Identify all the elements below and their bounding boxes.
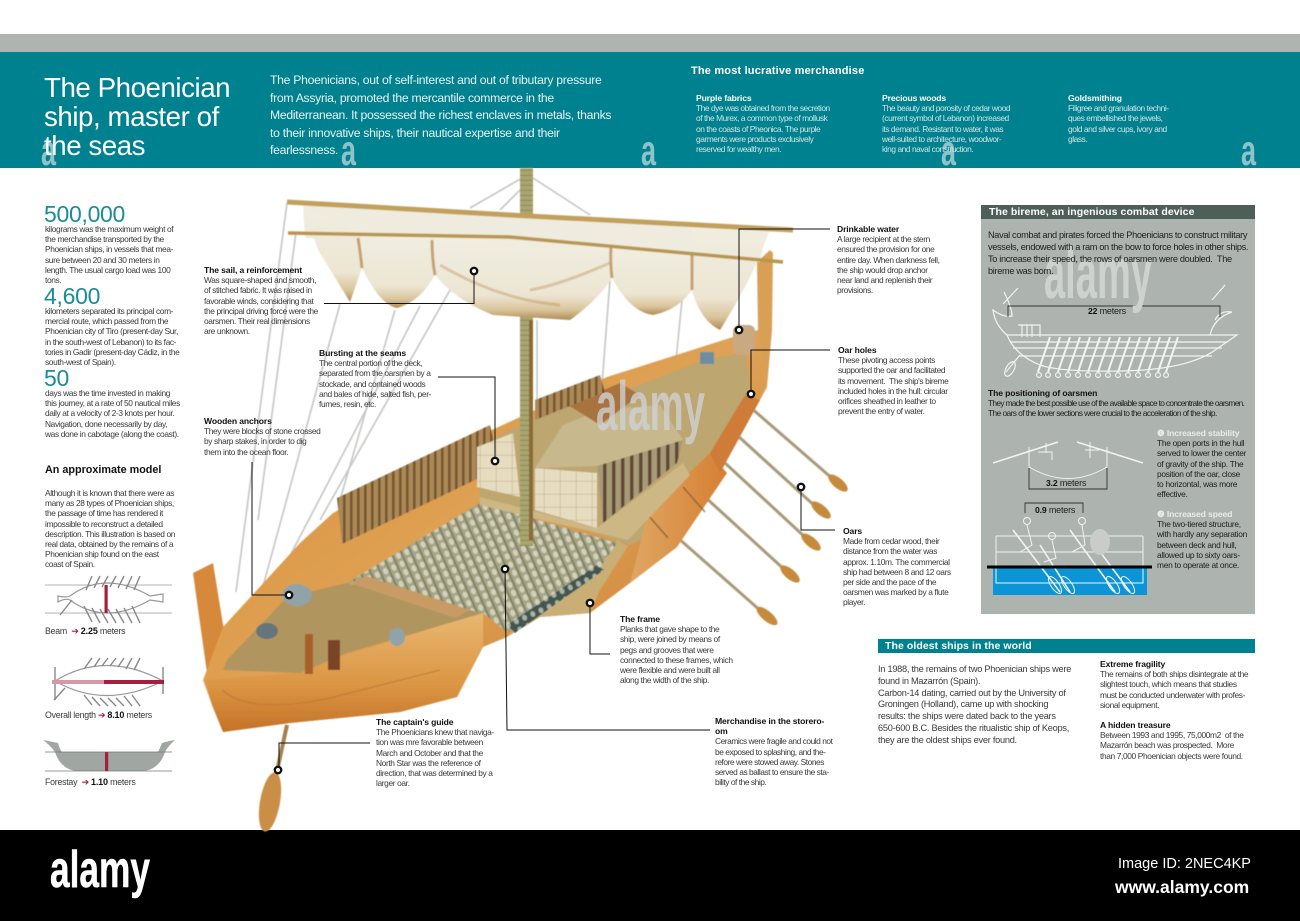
callout: bursting at the seams [319,348,432,409]
callout: drinkable water: provisions. [837,285,873,295]
callout: drinkable water: entire day. When darkness fell, [837,255,940,265]
teal header panel [0,52,1300,168]
callout: merchandise in the storeroom: Ceramics were fragile and could not [715,736,832,746]
callout: drinkable water: near land and replenish their [837,275,932,285]
watermark over bireme panel: alamy [1044,234,1152,314]
stat text: 500,000: length. The usual cargo load was 100 [45,265,170,275]
text: increased stability: The open ports in the hull [1157,438,1244,448]
text: approximate model: the passage of time has rendered it [45,508,163,518]
bireme heading: The bireme, an ingenious combat device [989,206,1195,218]
cargo base deck [477,352,752,545]
stat text: 500,000: tons. [45,275,61,285]
sail top band [303,205,767,262]
merchandise: purple fabrics: reserved for wealthy men. [696,144,781,154]
stat text: 4,600: south-west of Spain). [45,357,116,367]
callout: sail [204,265,318,336]
callout: sail: are unknown. [204,326,250,336]
callout: sail: The sail, a reinforcement [204,265,302,275]
merchandise: precious woods: king and naval construction. [882,144,973,154]
footer logo: alamy [50,841,150,899]
merchandise: goldsmithing: gold and silver cups, ivory and [1068,124,1167,134]
merchandise: goldsmithing [1068,93,1169,144]
stockade fence [337,425,500,544]
upper yard [287,202,793,230]
merchandise: goldsmithing: glass. [1068,134,1087,144]
stat text: 4,600 [45,306,180,367]
stern deck [223,583,483,673]
callout: wooden anchors: They were blocks of stone crossed [204,426,320,436]
callout: bursting at the seams: Bursting at the seams [319,348,406,358]
callout: the frame: pegs and grooves that were [620,645,713,655]
callout: wooden anchors [204,416,320,457]
callout line: water [739,229,830,330]
diagram: overall length [52,658,164,706]
merchandise: precious woods: The beauty and porosity of cedar wood [882,103,1010,113]
title: ship, master of [44,101,219,132]
watermark over ship: alamy [596,367,705,445]
sail folds [358,238,692,305]
intro text: to their innovative ships, their nautical expertise and their [270,126,560,140]
title: the seas [44,130,145,161]
text: hidden treasure [1100,720,1244,761]
callout: captain's guide: larger oar. [376,778,410,788]
text: hidden treasure: A hidden treasure [1100,720,1171,730]
merchandise: goldsmithing: Filigree and granulation techni- [1068,103,1169,113]
callout: merchandise in the storeroom: be exposed to splashing, and the- [715,747,826,757]
stem post [755,250,773,402]
callout: merchandise in the storeroom: bility of the ship. [715,777,766,787]
callout: drinkable water: A large recipient at the stern [837,234,930,244]
bireme header bar [981,205,1255,219]
oldest ships text [878,664,1071,745]
text: extreme fragility: The remains of both ships disintegrate at the [1100,669,1248,679]
callout: oar holes: supported the oar and facilitated [838,365,945,375]
top grey band [0,34,1300,52]
intro text: from Assyria, promoted the mercantile commerce in the [270,91,554,105]
footer image id: Image ID: 2NEC4KP [1118,856,1251,872]
oarsmen well [347,503,617,632]
text: increased speed [1157,509,1247,570]
callout: oar holes: These pivoting access points [838,355,935,365]
merchandise: goldsmithing: ques embellished the jewels, [1068,113,1162,123]
title: The Phoenician [44,72,230,103]
callout: oars: approx. 1.10m. The commercial [843,557,950,567]
watermark letters in header: a [41,127,57,175]
water barrel [733,325,755,355]
callout: drinkable water: the ship would drop anchor [837,265,928,275]
callout: oar holes: prevent the entry of water. [838,406,925,416]
leader lines and markers [252,229,835,773]
stat text: 4,600: Phoenician city of Tiro (present-day Sur, [45,326,178,336]
oldest ships text: Carbon-14 dating, carried out by the University of [878,688,1066,698]
bow outer planks [630,453,727,583]
callout: bursting at the seams: and bales of hide, salted fish, per- [319,389,431,399]
markers [275,268,804,773]
text: extreme fragility: must be conducted underwater with profes- [1100,690,1245,700]
callout: the frame: Planks that gave shape to the [620,624,719,634]
callout: oar holes: Oar holes [838,345,876,355]
merchandise: precious woods: (current symbol of Lebanon) increased [882,113,1009,123]
panel: bireme grey background [981,205,1255,614]
merchandise: purple fabrics: The dye was obtained from the secretion [696,103,830,113]
callout: the frame: ship, were joined by means of [620,634,720,644]
callout line: sail [324,271,474,304]
watermark letters in header: a [641,127,657,175]
stat text: 4,600: in the south-west of Lebanon) to its fac- [45,337,176,347]
stat text: 500,000: the merchandise transported by the [45,234,164,244]
callout: merchandise in the storeroom [715,716,833,787]
stat: 4,600: 4,600 [44,283,100,309]
callout: the frame: were flexible and were built all [620,665,720,675]
stat text: 50 [45,388,180,439]
text: hidden treasure: Between 1993 and 1995, 75,000m2 of the [1100,730,1244,740]
callout: merchandise in the storeroom: refore were stowed away. Stones [715,757,824,767]
callout line: merchandise [505,569,710,730]
text: increased speed: men to operate at once. [1157,560,1239,570]
callout: oars: per side and the pace of the [843,577,936,587]
walkway plank beside well [350,576,470,618]
oarsmen lower dark row [507,565,604,633]
callout: sail: of stitched fabric. It was raised in [204,285,312,295]
callout line: frame [590,603,610,654]
callout: sail: the principal driving force were the [204,306,318,316]
text: approximate model: real data, obtained by the remains of a [45,539,173,549]
merchandise: purple fabrics: on the coasts of Pheonica. The purple [696,124,820,134]
callout: sail: Was square-shaped and smooth, [204,275,316,285]
anchors [256,352,714,646]
callout: bursting at the seams: The central portion of the deck, [319,358,422,368]
text: increased stability: position of the oar, close [1157,469,1240,479]
cargo left stack [477,433,520,497]
oldest ships text: Groningen (Holland), came up with shocking [878,699,1048,709]
watermark letters in header: a [341,127,357,175]
bow plank seams [648,487,705,538]
callout: oar holes [838,345,948,416]
diagram: forestay [43,740,175,771]
callout: oars: distance from the water was [843,546,937,556]
callout line: oars [801,487,835,530]
bireme intro: Naval combat and pirates forced the Phoenicians to construct military [988,230,1247,240]
callout: bursting at the seams: stockade, and contained woods [319,379,425,389]
dimension bracket: 0.9 meters [1025,503,1083,513]
merchandise: purple fabrics: of the Murex, a common type of mollusk [696,113,827,123]
stat text: 4,600: kilometers separated its principal com- [45,306,173,316]
cargo cage [597,440,683,523]
bow lower tan strip [507,540,628,637]
cargo ledge [480,463,690,540]
text: positioning of oarsmen: The positioning of oarsmen [988,388,1097,398]
text: hidden treasure: Mazarrón beach was prospected. More [1100,740,1234,750]
callout: drinkable water [837,224,940,295]
label: overall length: Overall length ➔ 8.10 meters [45,710,152,720]
callout: oar holes: orifices sheathed in leather to [838,396,936,406]
bireme intro [988,230,1248,276]
merchandise: purple fabrics [696,93,830,154]
intro text [270,73,612,157]
forward fence top [535,375,605,420]
callout: the frame: connected to these frames, which [620,655,733,665]
merchandise: precious woods: Precious woods [882,93,946,103]
forward dark cargo [568,383,640,425]
callout: sail: favorable winds, considering that [204,296,313,306]
callout: merchandise in the storeroom: om [715,726,728,736]
stat text: 50: Navigation, done necessarily by day, [45,419,167,429]
text: increased stability: to horizontal, was more [1157,479,1237,489]
callout: captain's guide: March and October and that the [376,748,483,758]
text: extreme fragility: sional equipment. [1100,700,1159,710]
text: increased stability: of gravity of the ship. The [1157,459,1243,469]
text: increased stability: effective. [1157,489,1188,499]
intro text: The Phoenicians, out of self-interest and out of tributary pressure [270,73,601,87]
oldest ships text: found in Mazarrón (Spain). [878,676,980,686]
callout: captain's guide: North Star was the reference of [376,758,481,768]
text: positioning of oarsmen [988,388,1244,418]
stat text: 500,000: kilograms was the maximum weight of [45,224,173,234]
callout: oars: ship had between 8 and 12 oars [843,567,951,577]
text: extreme fragility: slightest touch, which means that studies [1100,679,1237,689]
hull silhouette [203,330,767,732]
diagram: rowers [987,518,1152,595]
stat text: 50: days was the time invested in making [45,388,170,398]
callout: drinkable water: ensured the provision for one [837,244,934,254]
watermark letters in header [41,127,1257,175]
callout: oars [843,526,951,607]
text: approximate model: many as 28 types of Phoenician ships, [45,498,174,508]
oldest ships text: results: the ships were dated back to the years [878,711,1056,721]
merchandise: goldsmithing: Goldsmithing [1068,93,1122,103]
callout: captain's guide: The Phoenicians knew that naviga- [376,727,494,737]
text: approximate model: impossible to reconstruct a detailed [45,519,163,529]
text: increased speed: ❷ Increased speed [1157,509,1232,519]
callout: wooden anchors: by sharp stakes, in order to dig [204,436,306,446]
stat text: 50: daily at a velocity of 2-3 knots per hour. [45,408,174,418]
text: extreme fragility: Extreme fragility [1100,659,1165,669]
text: increased stability: ❶ Increased stability [1157,428,1239,438]
cargo top bales [535,405,683,468]
text: positioning of oarsmen: The oars of the lower sections were crucial to the acceleration of the ship. [988,408,1217,418]
dimension bracket: 3.2 meters [1029,468,1107,489]
lower yard [288,233,783,262]
callout: bursting at the seams: separated from the oarsmen by a [319,368,431,378]
callout: captain's guide: tion was mre favorable between [376,737,483,747]
label: 3.2 meters: 3.2 meters [1046,478,1086,488]
stat text: 4,600: mercial route, which passed from the [45,316,168,326]
bireme intro: bireme was born. [988,266,1053,276]
illustration: Phoenician ship [193,168,850,833]
callout: oar holes: its movement. The ship's bireme [838,376,948,386]
callout: wooden anchors: Wooden anchors [204,416,272,426]
steering oar [255,725,287,833]
text: approximate model: coast of Spain. [45,559,95,569]
mast [520,168,533,546]
merchandise heading: The most lucrative merchandise [691,65,865,77]
oldest ships text: 650-600 B.C. Besides the ritualistic ship of Keops, [878,723,1069,733]
callout: captain's guide: The captain's guide [376,717,453,727]
diagram: bireme ship side view [993,285,1237,378]
bireme intro: To increase their speed, the rows of oarsmen were doubled. The [988,254,1232,264]
stat text: 500,000: Phoenician ships, in vessels that mea- [45,244,173,254]
watermark letters in header: a [1241,127,1257,175]
stern lower hull side [205,612,483,732]
text: increased speed: with hardly any separation [1157,529,1247,539]
callout line: anchors [252,462,289,595]
merchandise: precious woods [882,93,1010,154]
text: increased speed: The two-tiered structure, [1157,519,1241,529]
callout: sail: oarsmen. Their real dimensions [204,316,310,326]
callout: captain's guide [376,717,494,788]
callout: the frame [620,614,733,685]
stat: 50: 50 [44,365,69,391]
text: approximate model [45,488,175,569]
bow rim [710,395,760,473]
watermark letters in header: a [941,127,957,175]
label: beam: Beam ➔ 2.25 meters [45,626,125,636]
footer url: www.alamy.com [1115,877,1249,897]
stat text: 4,600: tories in Gadir (present-day Cádiz, in the [45,347,179,357]
text: approximate model: description. This illustration is based on [45,529,175,539]
merchandise: precious woods: its demand. Resistant to water, it was [882,124,1003,134]
text: increased speed: between deck and hull, [1157,540,1237,550]
cargo bales front [535,468,597,528]
stern hull plank seam [222,670,440,705]
text: approximate model: Phoenician ship found on the east [45,549,159,559]
diagram: hull section [993,442,1143,478]
callout: the frame: along the width of the ship. [620,675,709,685]
steering post [305,634,340,674]
text: increased stability [1157,428,1246,499]
dimension bracket: 22 meters [1008,306,1220,317]
callout: oars: Made from cedar wood, their [843,536,939,546]
label: 22 meters: 22 meters [1088,306,1126,316]
callout: oars: oarsmen was marked by a flute [843,587,948,597]
text: approximate model: Although it is known that there were as [45,488,174,498]
oars on starboard side [678,407,850,628]
bireme intro: vessels, endowed with a ram on the bow to force holes in other ships. [988,242,1248,252]
callout: oar holes: included holes in the hull: circular [838,386,948,396]
diagram: beam [45,576,172,623]
callout line: bursting [438,377,495,461]
merchandise: purple fabrics: garments were products exclusively [696,134,813,144]
footer black bar [0,830,1300,921]
stat: 500,000: 500,000 [44,201,125,227]
intro text: Mediterranean. It possessed the richest enclaves in metals, thanks [270,108,611,122]
oldest ships text: they are the oldest ships ever found. [878,735,1017,745]
stat text: 50: this journey, at a rate of 50 nautical miles [45,398,180,408]
heading: approximate model: An approximate model [45,464,161,476]
callout: wooden anchors: them into the ocean floor. [204,447,288,457]
merchandise: precious woods: well-suited to architecture, woodwor- [882,134,1001,144]
callout: oars: player. [843,597,865,607]
oldest ships text: In 1988, the remains of two Phoenician ships were [878,664,1071,674]
callout line: captain [279,743,370,770]
stern post [193,563,226,680]
label: forestay: Forestay ➔ 1.10 meters [45,777,136,787]
rigging lines [236,178,682,592]
stat text: 50: was done in cabotage (along the coast). [45,429,179,439]
oldest ships header bar [878,639,1255,653]
text: increased stability: served to lower the center [1157,448,1246,458]
callout: merchandise in the storeroom: Merchandise in the storero- [715,716,824,726]
title [44,72,230,161]
callout: merchandise in the storeroom: served as ballast to ensure the sta- [715,767,829,777]
merchandise: purple fabrics: Purple fabrics [696,93,752,103]
label: 0.9 meters: 0.9 meters [1035,505,1075,515]
callout: oars: Oars [843,526,862,536]
sail swags [303,205,770,330]
callout: bursting at the seams: fumes, resin, etc. [319,399,376,409]
callout: captain's guide: direction, that was determined by a [376,768,493,778]
callout: drinkable water: Drinkable water [837,224,899,234]
stat text: 500,000 [45,224,174,285]
text: hidden treasure: than 7,000 Phoenician objects were found. [1100,751,1243,761]
text: increased speed: allowed up to sixty oars- [1157,550,1240,560]
callout: the frame: The frame [620,614,660,624]
mast shadow [529,320,533,540]
oldest ships heading: The oldest ships in the world [885,640,1032,652]
text: positioning of oarsmen: They made the best possible use of the available space to concentrate the oarsmen. [988,398,1244,408]
stat text: 500,000: sure between 20 and 30 meters in [45,255,159,265]
text: extreme fragility [1100,659,1248,710]
callout line: oar holes [751,350,830,394]
intro text: fearlessness. [270,143,338,157]
